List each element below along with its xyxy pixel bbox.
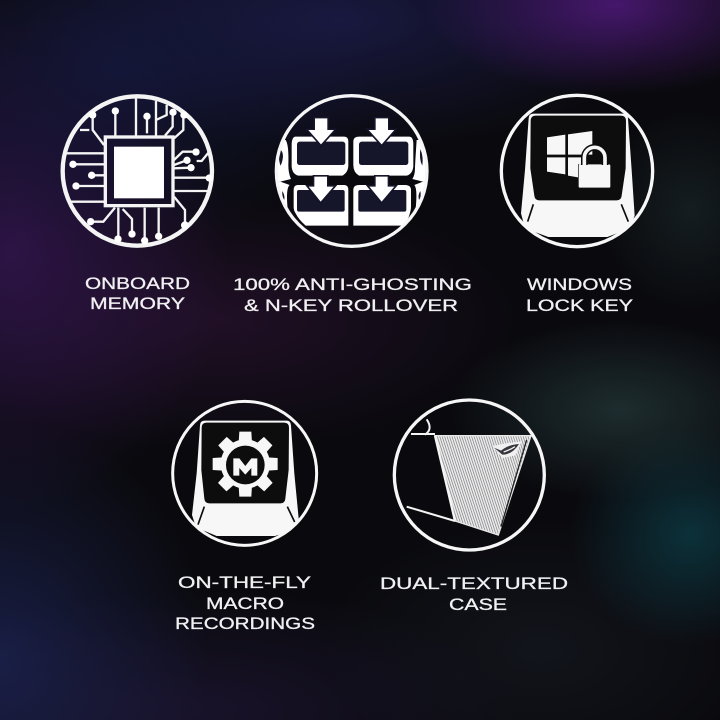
label: windows lock key: LOCK KEY [526, 296, 633, 315]
label: windows lock key [526, 275, 633, 315]
label: onboard memory: MEMORY [90, 294, 185, 313]
label: on-the-fly macro recordings [175, 573, 315, 633]
icon: anti-ghosting keys [273, 96, 430, 246]
icon: macro gear key [173, 401, 317, 545]
label: anti-ghosting and n-key rollover [233, 275, 472, 315]
icon: onboard memory chip [63, 96, 213, 246]
icon: dual-textured case [394, 400, 544, 550]
icon: ROG logo [492, 441, 522, 458]
label: on-the-fly macro recordings: MACRO [206, 594, 284, 613]
label: anti-ghosting and n-key rollover: & N-KEY ROLLOVER [244, 296, 458, 315]
label: on-the-fly macro recordings: RECORDINGS [175, 614, 315, 633]
label: on-the-fly macro recordings: ON-THE-FLY [178, 573, 311, 592]
label: dual-textured case: DUAL-TEXTURED [380, 574, 568, 593]
label: dual-textured case [380, 574, 568, 614]
icon: windows lock key [501, 95, 653, 247]
label: onboard memory: ONBOARD [85, 274, 190, 293]
label: windows lock key: WINDOWS [527, 275, 632, 294]
label: dual-textured case: CASE [449, 595, 507, 614]
label: anti-ghosting and n-key rollover: 100% ANTI-GHOSTING [233, 275, 472, 294]
label: onboard memory [85, 274, 190, 313]
